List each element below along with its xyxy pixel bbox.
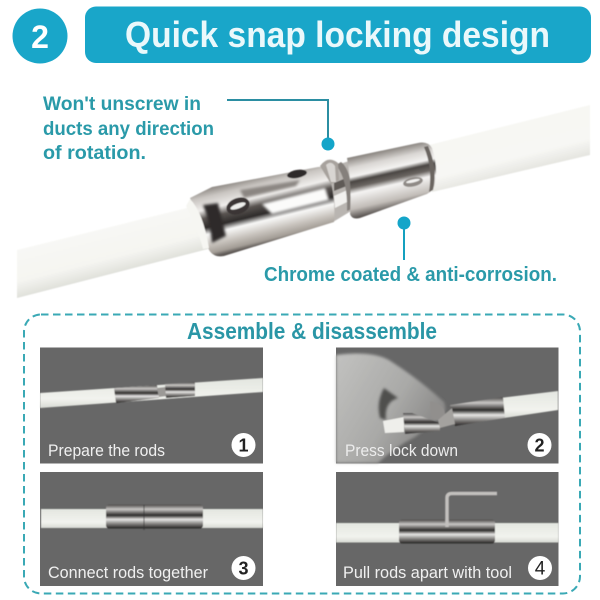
neck [322, 160, 356, 222]
right rod [425, 105, 590, 192]
callout text: won't unscrew [43, 93, 214, 164]
step 4 photo [336, 472, 558, 586]
step 1 photo: 1 [238, 436, 249, 456]
callout text: chrome coated: Chrome coated & anti-corrosion. [264, 264, 557, 286]
step 4 photo: Pull rods apart with tool [343, 563, 512, 582]
right barrel [347, 143, 436, 218]
left barrel shine [203, 203, 226, 243]
step 2 photo: Press lock down [345, 441, 458, 460]
tool [447, 494, 497, 527]
rod right [500, 391, 558, 418]
callout text: won't unscrew: ducts any direction [43, 118, 214, 140]
title banner: Quick snap locking design [125, 14, 550, 55]
callout line: chrome coating [398, 216, 410, 260]
number badge [12, 8, 68, 64]
step 2 photo: 2 [534, 436, 545, 456]
step 1 photo [40, 348, 263, 464]
panel: assemble and disassemble [24, 314, 580, 594]
photo: white rods with chrome connector [17, 105, 590, 298]
hand [336, 354, 445, 463]
left barrel [190, 167, 334, 256]
step 3 photo: 3 [238, 558, 249, 578]
title banner [85, 6, 591, 63]
step 3 photo: Connect rods together [48, 563, 208, 582]
rod end inside left barrel [186, 199, 209, 249]
left rod [17, 206, 212, 298]
step 4 photo: 4 [535, 558, 546, 580]
step 1 photo: Prepare the rods [48, 441, 165, 460]
callout line: lock pin [227, 100, 334, 150]
callout text: won't unscrew: Won't unscrew in [43, 93, 201, 115]
right barrel end [424, 146, 435, 192]
slots and pin [224, 194, 252, 218]
step 2 photo [336, 348, 558, 464]
number badge: 2 [31, 19, 49, 55]
callout text: won't unscrew: of rotation. [43, 142, 146, 164]
rod stub [383, 417, 404, 433]
connector [450, 397, 505, 426]
panel heading: Assemble & disassemble [187, 318, 437, 344]
step 3 photo [40, 472, 263, 586]
